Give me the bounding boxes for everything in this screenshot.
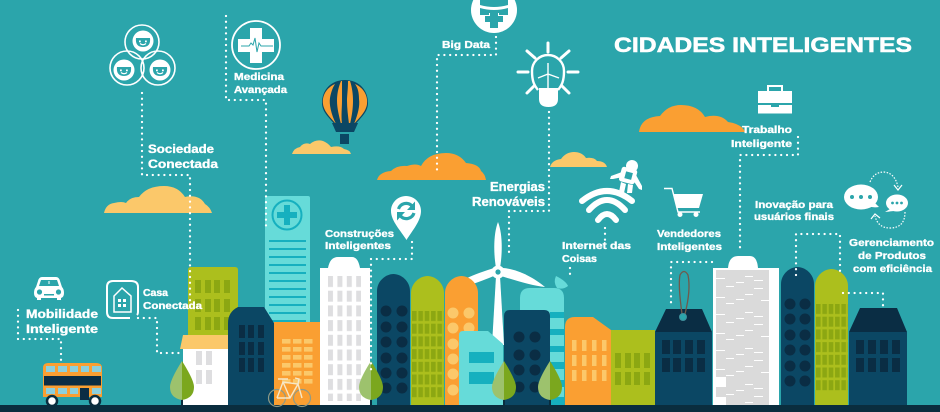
building: navy block	[228, 307, 274, 405]
label: Construções Inteligentes: Construções	[325, 228, 394, 240]
icon: medicine cross	[232, 21, 280, 69]
icon: robot	[610, 160, 642, 193]
label: Energias Renováveis: Energias	[490, 180, 545, 194]
tree 3	[492, 361, 516, 406]
label: Casa Conectada	[143, 288, 203, 312]
label: Mobilidade Inteligente: Mobilidade	[26, 307, 98, 321]
label: Casa Conectada: Casa	[143, 288, 168, 299]
label: Casa Conectada: Conectada	[143, 301, 203, 312]
icon: renewable energy bulb	[518, 43, 578, 107]
label: Internet das Coisas: Coisas	[562, 253, 597, 265]
label: Gerenciamento de Produtos com eficiência: Gerenciamento	[849, 237, 934, 249]
label: Gerenciamento de Produtos com eficiência: com eficiência	[853, 263, 932, 275]
label: Sociedade Conectada	[148, 144, 219, 171]
label: Gerenciamento de Produtos com eficiência: de Produtos	[858, 250, 926, 262]
icon: wifi	[582, 191, 632, 220]
label: Energias Renováveis	[472, 180, 545, 209]
tree 2	[359, 361, 383, 406]
wind turbine	[465, 222, 545, 345]
bicycle	[268, 378, 310, 406]
label: Internet das Coisas	[562, 240, 631, 265]
label: Construções Inteligentes: Inteligentes	[325, 240, 391, 252]
cloud: orange right	[639, 105, 745, 132]
tree 4	[538, 361, 562, 406]
ground	[0, 405, 940, 412]
label: Inovação para usuários finais	[754, 199, 834, 223]
label: Internet das Coisas: Internet das	[562, 240, 631, 252]
label: Vendedores Inteligentes: Vendedores	[657, 228, 721, 240]
cloud: yellow small by balloon	[292, 140, 351, 154]
cloud: orange centre	[377, 153, 486, 180]
label: Mobilidade Inteligente	[26, 307, 98, 336]
icon: car	[34, 277, 64, 300]
icon: shopping cart	[664, 188, 703, 217]
label: Sociedade Conectada: Sociedade	[148, 144, 214, 156]
label: Gerenciamento de Produtos com eficiência	[849, 237, 934, 275]
icon: connected house	[107, 281, 138, 318]
building: orange chamfered	[565, 317, 611, 405]
cloud: yellow left	[104, 186, 212, 213]
label: Vendedores Inteligentes: Inteligentes	[657, 241, 722, 253]
building: green block	[188, 267, 238, 335]
label: Vendedores Inteligentes	[657, 228, 722, 253]
icon: briefcase	[758, 86, 792, 114]
label: Trabalho Inteligente	[731, 124, 792, 150]
building: white grey tower	[713, 256, 779, 405]
building: navy dome	[377, 274, 410, 405]
building: orange dome	[445, 276, 478, 405]
building: navy circles block	[504, 310, 550, 405]
label: Trabalho Inteligente: Inteligente	[731, 138, 792, 150]
icon: speech bubbles exchange	[844, 172, 908, 228]
label: Inovação para usuários finais: Inovação para	[755, 199, 833, 211]
building: cyan striped tower	[520, 276, 568, 405]
label: Energias Renováveis: Renováveis	[472, 195, 545, 209]
title: CIDADES INTELIGENTES	[614, 33, 912, 57]
label: Inovação para usuários finais: usuários finais	[754, 211, 834, 223]
bus	[43, 363, 102, 406]
tree 1	[170, 361, 194, 406]
building: orange block	[274, 322, 320, 405]
building: green low block	[611, 330, 655, 405]
building: light cyan block	[459, 331, 503, 405]
building: hospital tower	[265, 196, 310, 326]
dotted connectors	[18, 16, 883, 372]
building: white tower	[320, 257, 370, 405]
building: house with awning	[180, 335, 229, 405]
label: Medicina Avançada: Avançada	[234, 84, 287, 96]
icon: connected people	[110, 25, 175, 85]
icon: big data	[471, 0, 517, 33]
hot-air balloon	[322, 80, 368, 144]
label: Sociedade Conectada: Conectada	[148, 159, 219, 171]
cloud: yellow small right	[550, 152, 607, 167]
building: navy roof right	[849, 308, 907, 405]
label: Construções Inteligentes	[325, 228, 394, 252]
label: Medicina Avançada	[234, 71, 287, 96]
building: green dome	[411, 276, 444, 405]
icon: location pin with refresh	[391, 196, 421, 240]
building: navy dome right	[781, 267, 814, 405]
label: Big Data: Big Data	[442, 39, 490, 51]
label: Trabalho Inteligente: Trabalho	[742, 124, 792, 136]
building: green dome right	[815, 269, 848, 405]
label: Mobilidade Inteligente: Inteligente	[26, 322, 98, 336]
building: navy tag with string	[655, 272, 712, 405]
label: Medicina Avançada: Medicina	[234, 71, 284, 83]
